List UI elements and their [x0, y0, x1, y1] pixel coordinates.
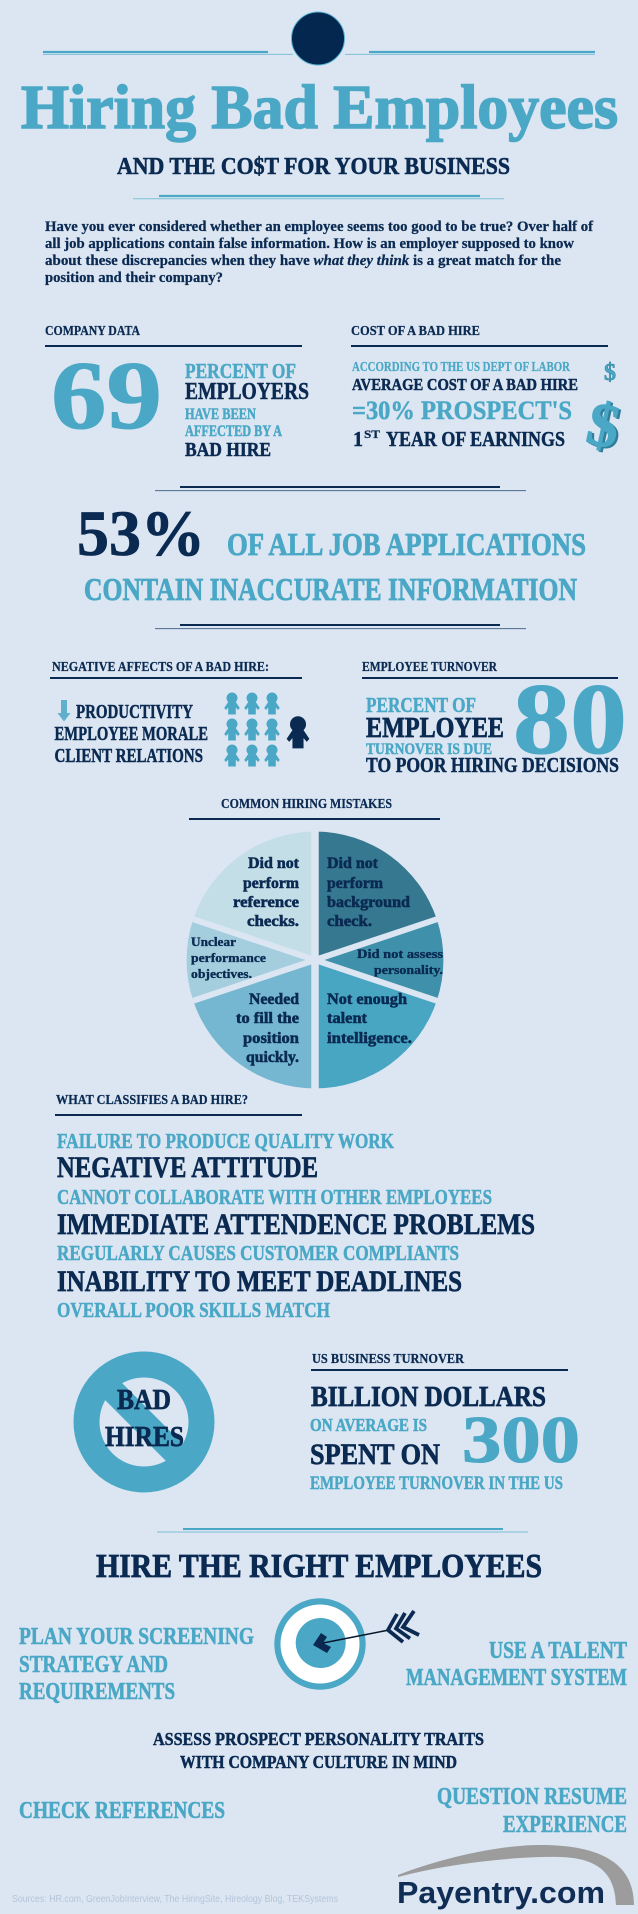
slice label: talent intelligence [327, 991, 412, 1047]
sign text [105, 1384, 184, 1453]
bad hire traits list: NEGATIVE ATTITUDE [57, 1151, 318, 1184]
bad hire traits list: CANNOT COLLABORATE WITH OTHER EMPLOYEES [57, 1185, 492, 1209]
banner: 53 percent [77, 498, 586, 607]
panel: company data [45, 324, 309, 461]
tip: plan your screening: PLAN YOUR SCREENING [19, 1624, 254, 1650]
slice label: performance objectives: performance [191, 951, 266, 965]
slice label: fill position: position [243, 1030, 299, 1047]
panel: cost of a bad hire [351, 324, 628, 464]
heading: company data: COMPANY DATA [45, 324, 141, 339]
title: Hiring Bad Employees [21, 74, 618, 142]
cost text: AVERAGE COST OF A BAD HIRE [352, 375, 578, 394]
logo: payentry: Payentry.com [397, 1875, 605, 1910]
stat description: AFFECTED BY A [185, 423, 283, 440]
rule above 53 percent [155, 487, 526, 491]
icon: no bad hires sign [86, 1364, 202, 1480]
turnover description: SPENT ON [310, 1438, 440, 1471]
icon: people group [224, 692, 280, 766]
stat description: EMPLOYERS [185, 379, 309, 405]
heading: what classifies a bad hire: WHAT CLASSIFIES A BAD HIRE? [56, 1093, 248, 1108]
slice label: reference checks [233, 855, 300, 930]
panel: us business turnover [310, 1352, 580, 1494]
slice label: reference checks: checks. [247, 913, 299, 930]
rule below 53 percent [155, 625, 526, 629]
negative affects list: PRODUCTIVITY [76, 701, 193, 723]
tip: plan your screening: REQUIREMENTS [19, 1679, 175, 1705]
sign text: BAD [117, 1384, 171, 1416]
intro paragraph: position and their company? [45, 270, 223, 286]
bad hire traits list: FAILURE TO PRODUCE QUALITY WORK [57, 1129, 395, 1153]
subtitle: AND THE CO$T FOR YOUR BUSINESS [117, 154, 510, 180]
intro paragraph: about these discrepancies when they have what they think is a great match for the [45, 253, 562, 269]
negative affects list: CLIENT RELATIONS [54, 745, 203, 767]
heading: negative affects: NEGATIVE AFFECTS OF A BAD HIRE: [52, 660, 269, 675]
heading: common hiring mistakes: COMMON HIRING MISTAKES [221, 797, 392, 812]
turnover description [310, 1382, 563, 1494]
cost text: ACCORDING TO THE US DEPT OF LABOR [352, 360, 571, 375]
sources: Sources: HR.com, GreenJobInterview, The HiringSite, Hireology Blog, TEKSystems [12, 1893, 338, 1905]
icon: small dollar: $ [604, 360, 616, 386]
cost text [352, 360, 578, 451]
turnover description: ON AVERAGE IS [310, 1415, 427, 1435]
slice label: background check [327, 855, 410, 930]
tip: plan your screening: STRATEGY AND [19, 1652, 168, 1678]
slice label: performance objectives: Unclear [191, 935, 236, 949]
subtitle rule [133, 196, 504, 199]
bad hire traits list: OVERALL POOR SKILLS MATCH [57, 1298, 330, 1322]
panel: employee turnover [362, 660, 627, 777]
icon: target and arrow [274, 1598, 419, 1690]
slice label: fill position [236, 991, 299, 1066]
cost text: 1 [353, 427, 363, 451]
cost text: YEAR OF EARNINGS [386, 427, 565, 451]
icon: large dollar: $ [583, 391, 628, 464]
tip: plan your screening [19, 1624, 254, 1705]
slice label: background check: check. [327, 913, 372, 930]
stat description: HAVE BEEN [185, 406, 256, 423]
intro paragraph [45, 219, 593, 286]
heading: hire the right employees: HIRE THE RIGHT EMPLOYEES [96, 1548, 542, 1585]
slice label: background check: background [327, 894, 410, 911]
slice label: talent intelligence: Not enough [327, 991, 407, 1008]
slice label: background check: Did not [327, 855, 379, 872]
tip: assess personality [153, 1729, 484, 1772]
bad hire traits list: REGULARLY CAUSES CUSTOMER COMPLIANTS [57, 1241, 459, 1265]
panel: negative affects [50, 660, 309, 767]
intro paragraph: all job applications contain false information. How is an employer supposed to know [45, 236, 575, 252]
slice label: background check: perform [327, 875, 383, 892]
tip: talent management system [406, 1638, 627, 1691]
stat: 69: 69 [51, 342, 162, 450]
slice label: fill position: quickly. [246, 1049, 299, 1066]
cost text: ST [364, 427, 380, 441]
tip: question resume [437, 1784, 627, 1838]
slice label: reference checks: perform [243, 875, 299, 892]
slice label: fill position: Needed [249, 991, 299, 1008]
turnover description: BILLION DOLLARS [311, 1382, 546, 1413]
icon: down arrow [58, 700, 70, 722]
banner: 53 percent: 53% [77, 498, 205, 570]
slice label: fill position: to fill the [236, 1010, 299, 1027]
slice label: talent intelligence: intelligence. [327, 1030, 412, 1047]
header ornament: circle and rules [43, 12, 595, 65]
tip: assess personality: WITH COMPANY CULTURE IN MIND [180, 1752, 457, 1772]
stat description: BAD HIRE [185, 439, 271, 461]
slice label: reference checks: Did not [248, 855, 300, 872]
tip: assess personality: ASSESS PROSPECT PERSONALITY TRAITS [153, 1729, 484, 1749]
logo: payentry [397, 1845, 634, 1910]
icon: bad hire person [287, 716, 309, 748]
sign text: HIRES [105, 1421, 184, 1453]
negative affects list [54, 701, 208, 767]
icon: large dollar: $ [581, 389, 626, 462]
bad hire traits list: IMMEDIATE ATTENDENCE PROBLEMS [57, 1208, 535, 1241]
stat: 300: 300 [462, 1403, 580, 1477]
turnover text: TURNOVER IS DUE [366, 741, 492, 758]
tip: check references: CHECK REFERENCES [19, 1798, 225, 1824]
intro paragraph: Have you ever considered whether an employee seems too good to be true? Over half of [45, 219, 593, 235]
slice label: performance objectives [191, 935, 266, 981]
slice label: personality: Did not assess [357, 947, 443, 961]
heading: us business turnover: US BUSINESS TURNOVER [312, 1352, 465, 1367]
turnover text [366, 693, 619, 777]
slice label: performance objectives: objectives. [191, 967, 252, 981]
stat description: PERCENT OF [185, 359, 296, 383]
turnover text: PERCENT OF [366, 693, 476, 717]
turnover text: EMPLOYEE [366, 713, 504, 744]
bad hire traits list [57, 1129, 535, 1322]
slice label: personality [357, 947, 443, 977]
turnover description: EMPLOYEE TURNOVER IN THE US [310, 1473, 563, 1494]
slice label: personality: personality. [374, 963, 443, 977]
stat: 80: 80 [513, 663, 627, 776]
heading: employee turnover: EMPLOYEE TURNOVER [362, 660, 498, 675]
stat description [185, 359, 309, 461]
rule above hire the right employees [157, 1529, 528, 1532]
slice label: reference checks: reference [233, 894, 299, 911]
heading: cost of a bad hire: COST OF A BAD HIRE [351, 324, 480, 339]
cost text: =30% PROSPECT'S [352, 396, 572, 425]
pie chart: common hiring mistakes [184, 825, 446, 1095]
panel: what classifies a bad hire [55, 1093, 535, 1322]
bad hire traits list: INABILITY TO MEET DEADLINES [57, 1265, 462, 1298]
negative affects list: EMPLOYEE MORALE [54, 723, 208, 745]
slice label: talent intelligence: talent [327, 1010, 368, 1027]
